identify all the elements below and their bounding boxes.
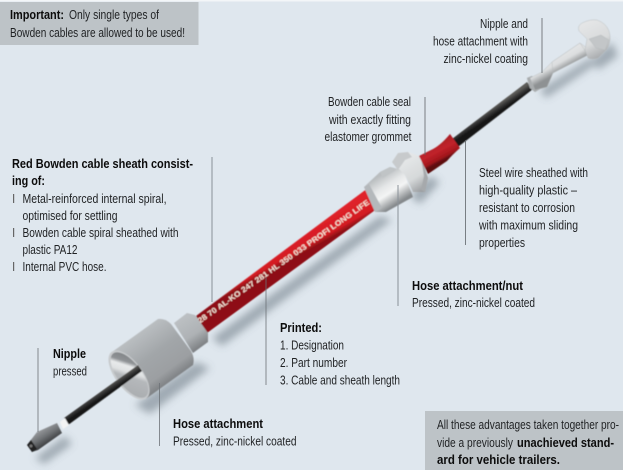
red sheath xyxy=(196,188,378,333)
nipple: pressed xyxy=(27,418,69,452)
text: red sheath description: optimised for settling xyxy=(22,209,118,223)
text: steel wire: Steel wire sheathed with xyxy=(479,166,588,180)
text: steel wire: resistant to corrosion xyxy=(479,201,575,215)
text: cable seal: Bowden cable seal xyxy=(328,95,411,109)
printed designation on the sheath: 28 70 AL-KO 247 281 HL 350 033 PROFI LONG LIFE xyxy=(196,198,371,325)
leader line: nipple xyxy=(37,348,39,432)
callout: important note: Important: xyxy=(10,8,64,22)
upper nipple and hose attachment xyxy=(527,20,610,92)
text: red sheath description: Internal PVC hose. xyxy=(22,260,106,274)
text: printed xyxy=(280,321,400,388)
black wire: upper end xyxy=(448,82,533,150)
text: cable seal xyxy=(324,95,412,144)
text: cable seal: with exactly fitting xyxy=(328,113,411,127)
callout: conclusion: ard for vehicle trailers. xyxy=(437,453,560,467)
text: nipple: pressed xyxy=(53,364,87,378)
text: nipple xyxy=(53,347,87,378)
leader line: printed xyxy=(265,278,267,385)
text: hose attachment xyxy=(173,417,297,448)
callout: important note xyxy=(0,2,198,45)
text: printed: 3. Cable and sheath length xyxy=(280,374,400,388)
lower black wire xyxy=(64,365,142,425)
text: printed: 1. Designation xyxy=(280,338,344,352)
text: hose attachment/nut: Pressed, zinc-nickel coated xyxy=(412,296,535,310)
text: printed: Printed: xyxy=(280,321,322,335)
leader line: upper nipple xyxy=(541,18,543,73)
text: upper nipple coating: Nipple and xyxy=(480,17,528,31)
leader line: sheath xyxy=(211,157,213,302)
leader line: hose nut xyxy=(397,185,399,306)
text: printed: 2. Part number xyxy=(280,356,347,370)
text: hose attachment: Hose attachment xyxy=(173,417,264,431)
text: steel wire: with maximum sliding xyxy=(478,218,578,232)
text: upper nipple coating: hose attachment with xyxy=(433,34,528,48)
text: upper nipple coating: zinc-nickel coating xyxy=(444,52,528,66)
callout: conclusion: vide a previously xyxy=(437,436,514,450)
text: red sheath description: ing of: xyxy=(12,174,45,188)
callout: conclusion xyxy=(425,411,623,470)
text: red sheath description: plastic PA12 xyxy=(22,243,78,257)
text: hose attachment/nut: Hose attachment/nut xyxy=(412,279,524,293)
leader line: hose attachment xyxy=(158,383,160,446)
callout: important note: Bowden cables are allowed to be used! xyxy=(10,26,185,40)
text: steel wire: high-quality plastic – xyxy=(479,184,577,198)
text: hose attachment: Pressed, zinc-nickel coated xyxy=(173,434,297,448)
Bowden cable seal: red grommet xyxy=(419,134,460,174)
hose attachment and nut xyxy=(364,152,428,212)
text: upper nipple coating xyxy=(433,17,528,66)
text: hose attachment/nut xyxy=(412,279,535,310)
leader line: steel wire xyxy=(464,140,466,245)
callout: important note: Only single types of xyxy=(69,8,159,22)
text: steel wire xyxy=(478,166,588,250)
text: red sheath description xyxy=(12,157,193,274)
text: steel wire: properties xyxy=(479,236,525,250)
hose attachment: large cylinder xyxy=(101,313,208,406)
text: nipple: Nipple xyxy=(53,347,86,361)
text: red sheath description: Bowden cable spiral sheathed with xyxy=(22,226,179,240)
text: red sheath description: Red Bowden cable sheath consist- xyxy=(12,157,193,171)
leader line: seal xyxy=(424,97,426,155)
text: red sheath description: Metal-reinforced internal spiral, xyxy=(22,192,166,206)
text: cable seal: elastomer grommet xyxy=(324,130,412,144)
